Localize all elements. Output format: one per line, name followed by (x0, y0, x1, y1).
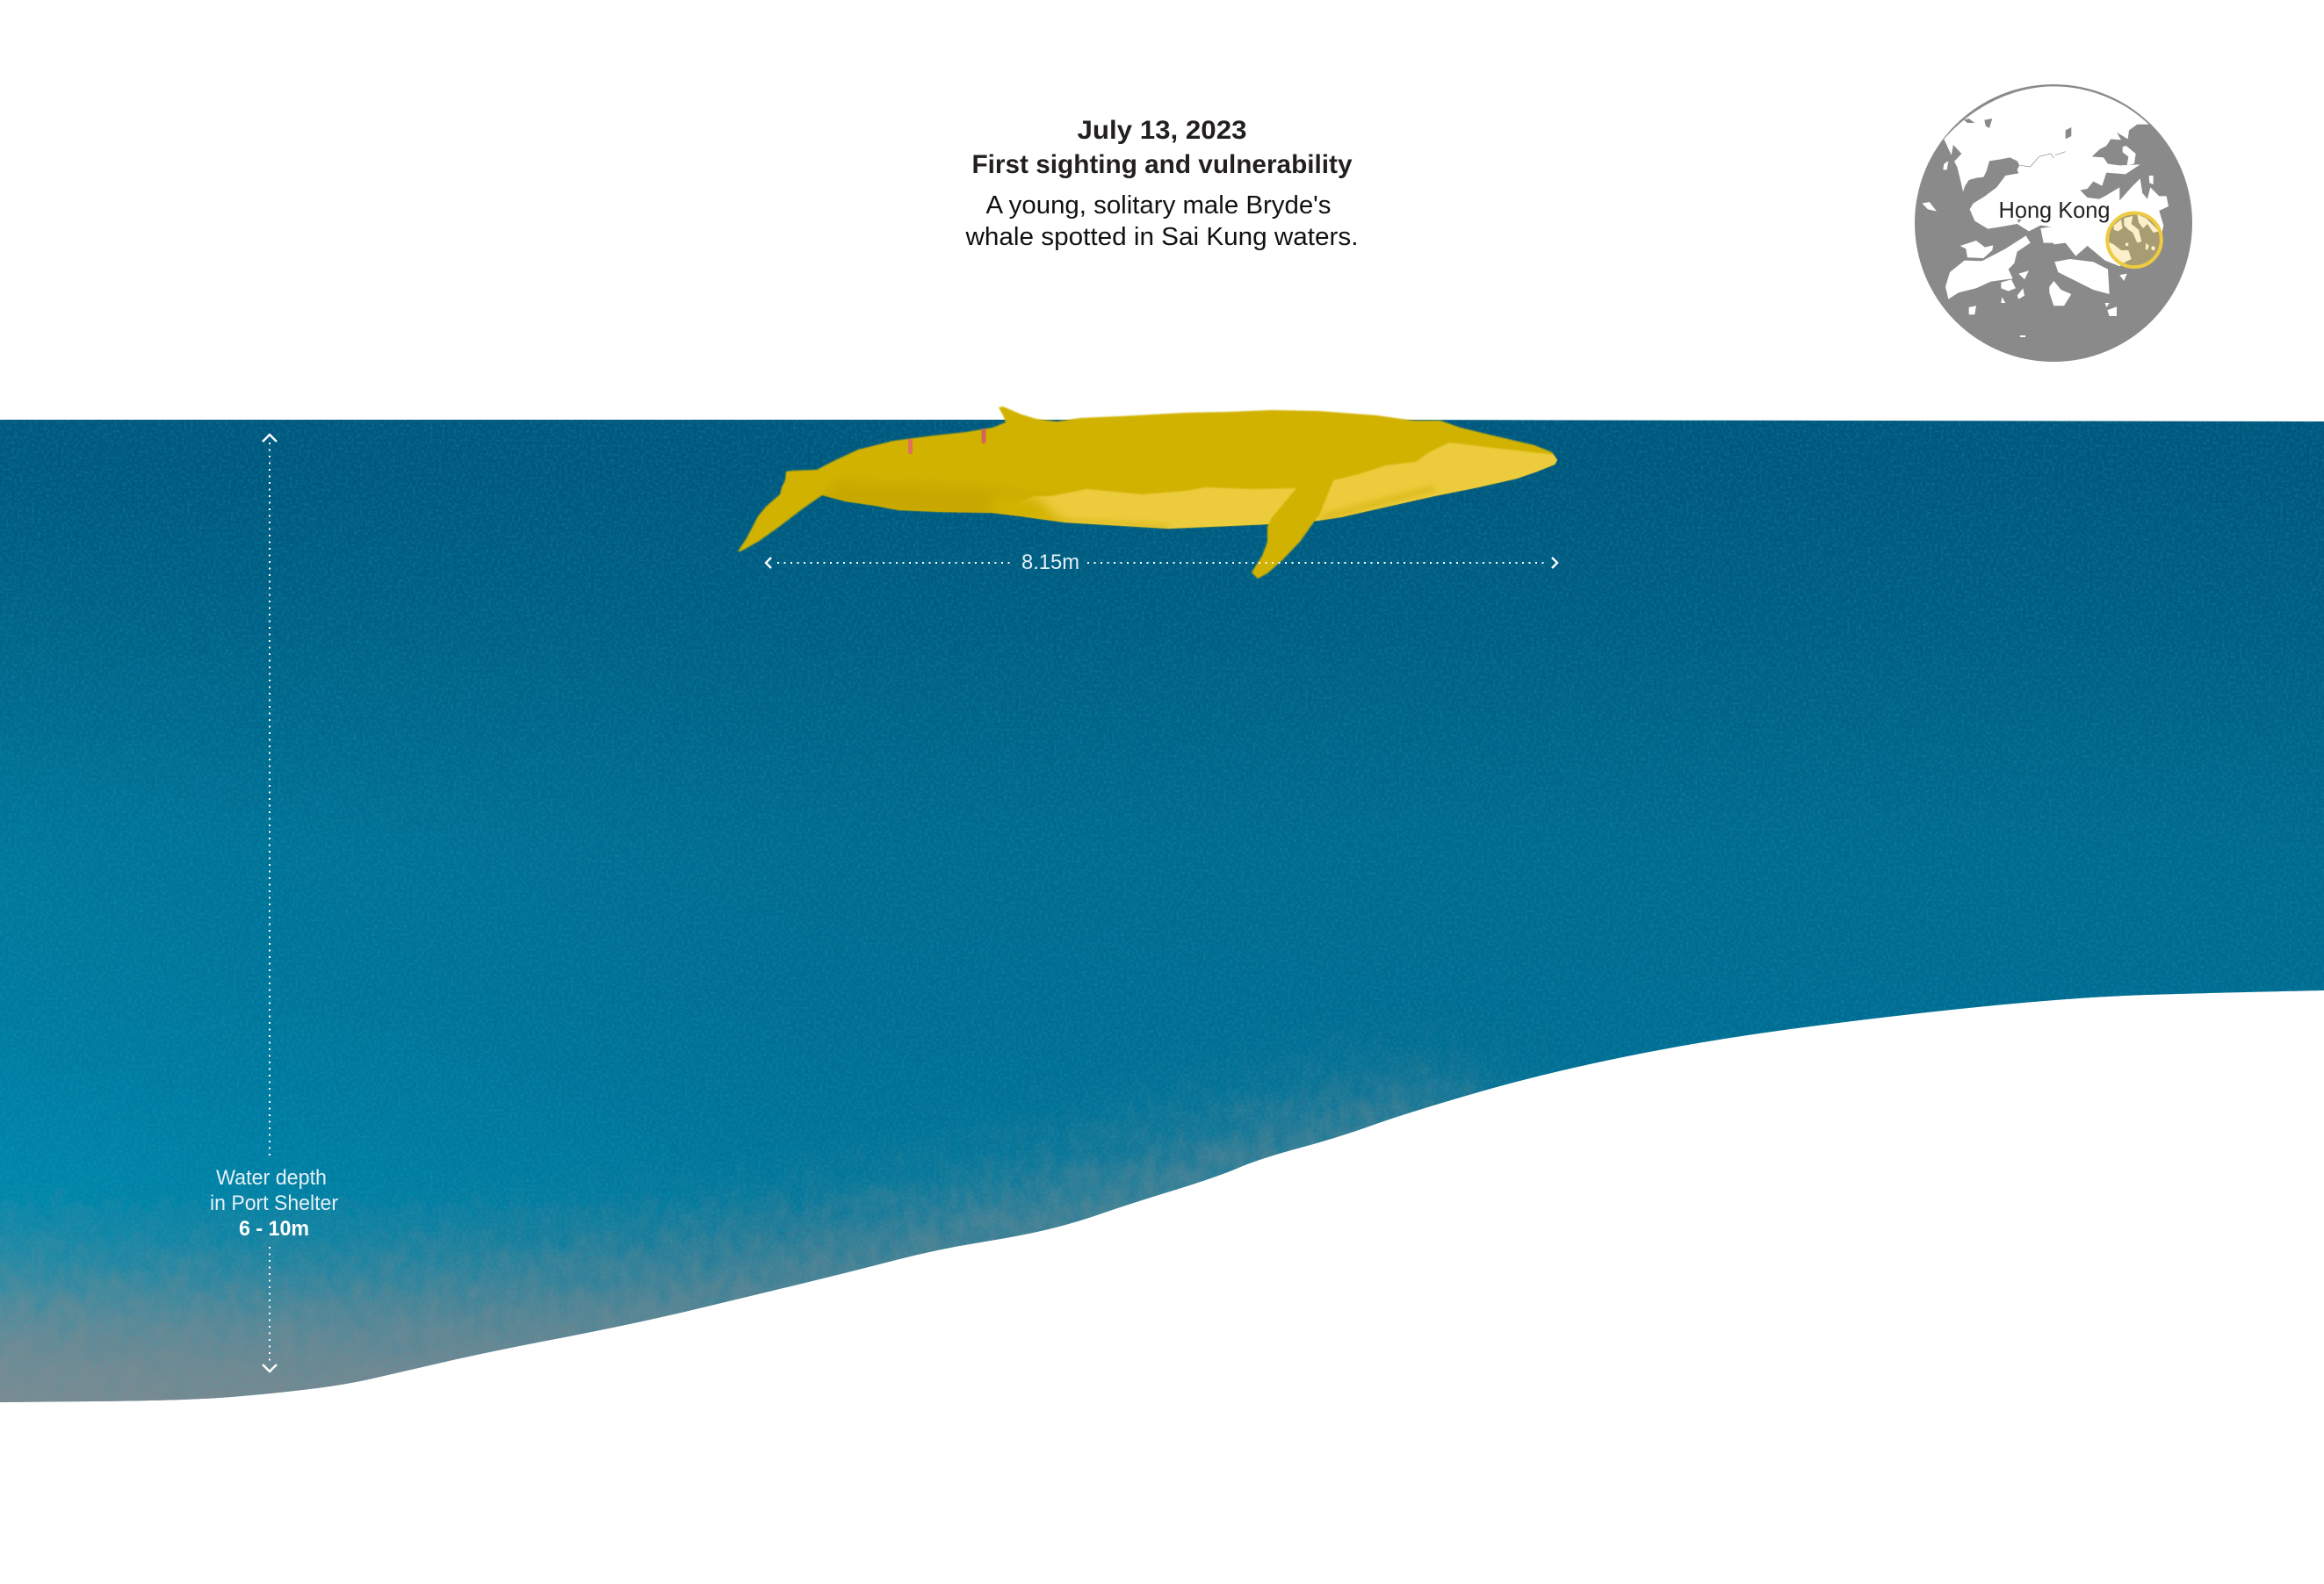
whale pectoral flipper (1252, 480, 1333, 579)
depth label: 6 - 10m (239, 1217, 309, 1241)
highlight ring (2107, 212, 2162, 267)
map landmass (1922, 86, 2169, 337)
small islands (1922, 146, 2154, 337)
lantau island (1945, 235, 2031, 299)
throat shadow (1322, 488, 1434, 518)
locator map of Hong Kong (1915, 84, 2192, 362)
water grain (0, 413, 2324, 1414)
water gradient (0, 420, 2324, 1402)
right arrowhead (1552, 558, 1557, 568)
length dotted line (777, 562, 1548, 564)
bottom arrowhead (263, 1364, 277, 1372)
seabed silt haze (0, 1032, 1510, 1402)
hong kong island (2054, 259, 2110, 294)
depth label (210, 1166, 338, 1241)
top arrowhead (263, 435, 277, 442)
description text (964, 191, 1358, 251)
left arrowhead (766, 558, 771, 568)
map label: Hong Kong (1999, 197, 2110, 223)
heading date: July 13, 2023 (1077, 116, 1247, 145)
tail shadow (817, 481, 1054, 527)
depth label: Water depth (216, 1166, 327, 1190)
horizontal water shading (336, 420, 2324, 1386)
heading block (964, 116, 1358, 251)
wound mark front (982, 428, 985, 443)
description text: whale spotted in Sai Kung waters. (964, 223, 1358, 251)
rear belly fade (992, 496, 1067, 527)
highlight water (2107, 212, 2162, 267)
whale body (738, 407, 1557, 551)
whale shading (817, 443, 1563, 536)
depth label: in Port Shelter (210, 1192, 338, 1215)
lamma island (2049, 281, 2071, 306)
highlight land (2107, 214, 2159, 263)
heading title: First sighting and vulnerability (971, 150, 1353, 179)
water body with seabed edge (0, 420, 2324, 1402)
rear belly patch (1010, 487, 1296, 536)
depth dotted line (269, 443, 271, 1363)
whale illustration (738, 407, 1563, 579)
inland water details (1964, 119, 2071, 223)
water depth measure (210, 435, 338, 1372)
mainland and new territories (1944, 86, 2169, 266)
description text: A young, solitary male Bryde's (985, 191, 1332, 220)
whale length measure (766, 551, 1557, 574)
airport island (1960, 241, 1993, 258)
rear belly lower edge (1054, 520, 1168, 527)
length label: 8.15m (1021, 551, 1079, 574)
map disc (1915, 84, 2192, 362)
wound mark rear (908, 439, 913, 454)
port shelter highlight (2107, 212, 2162, 267)
throat patch (1313, 443, 1563, 527)
northern border river (2020, 152, 2066, 167)
